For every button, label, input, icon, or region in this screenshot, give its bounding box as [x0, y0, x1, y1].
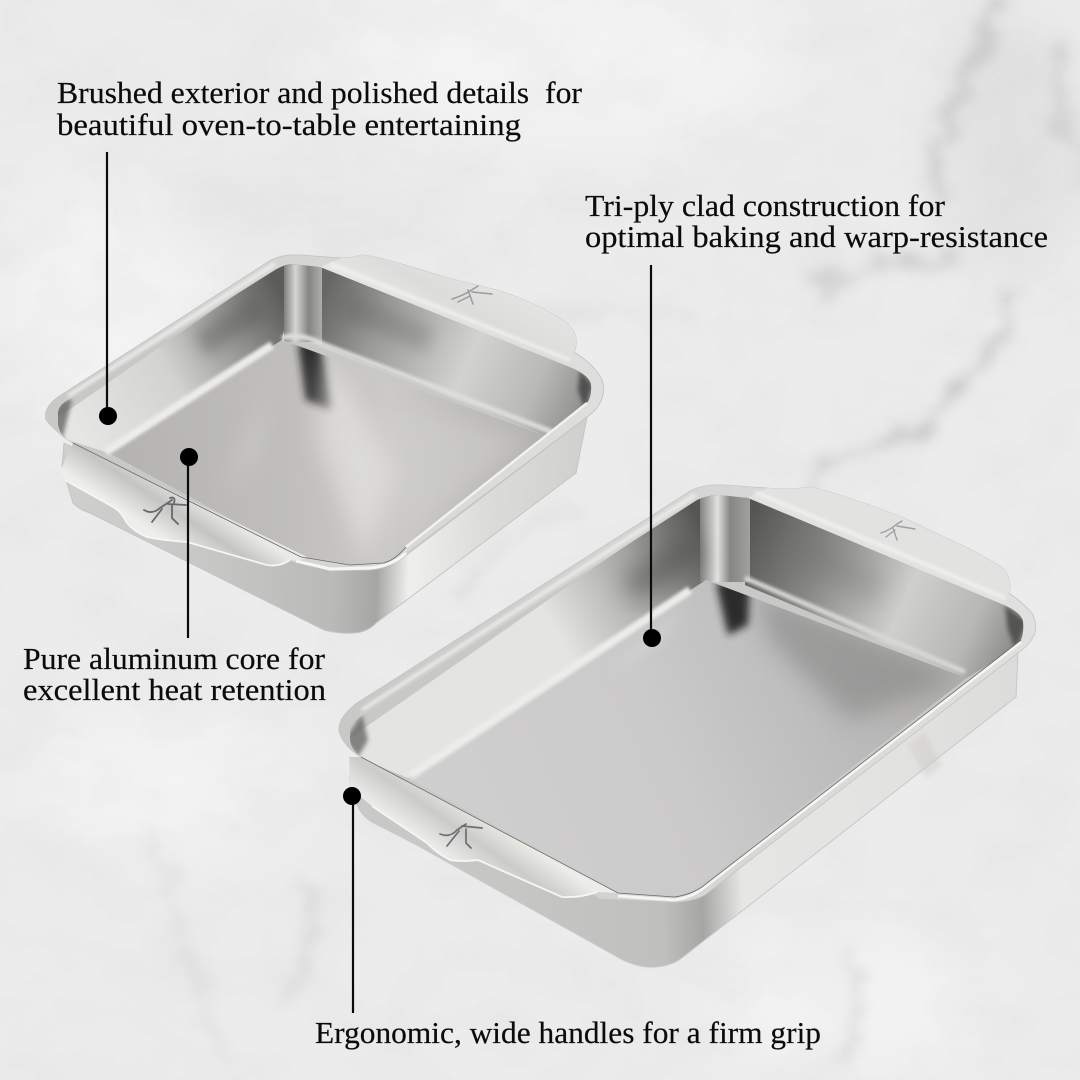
back handle	[320, 255, 576, 368]
text: tri-ply clad	[585, 188, 1048, 254]
marker dot	[643, 629, 661, 647]
leader line	[187, 457, 189, 638]
marker dot	[343, 787, 361, 805]
text: aluminum core	[23, 641, 327, 707]
marker dot	[99, 407, 117, 425]
large pan emblem, back	[881, 521, 915, 540]
large pan body exterior	[350, 653, 1018, 967]
marker dot	[180, 448, 198, 466]
text: aluminum core: Pure aluminum core for	[23, 641, 326, 676]
large pan back handle	[748, 487, 1010, 605]
pan: small square pan	[40, 250, 610, 633]
large pan rim	[339, 485, 1036, 902]
pan body exterior	[62, 417, 587, 633]
callout: ergonomic handles	[343, 787, 361, 1013]
callout: brushed exterior	[99, 152, 117, 425]
text: brushed exterior: beautiful oven-to-table entertaining	[57, 107, 521, 142]
handle emblem, back	[452, 286, 492, 304]
text: tri-ply clad: optimal baking and warp-resistance	[585, 219, 1048, 254]
marble reflection on body	[908, 732, 942, 778]
rim	[46, 255, 604, 571]
text: ergonomic handles: Ergonomic, wide handles for a firm grip	[315, 1015, 821, 1050]
text: brushed exterior	[57, 75, 583, 142]
callout: tri-ply clad	[643, 265, 661, 647]
front handle	[61, 443, 307, 565]
leader line	[352, 796, 354, 1013]
large pan cavity	[350, 495, 1024, 896]
large pan front handle	[349, 757, 618, 897]
pan: large rectangular pan	[339, 480, 1040, 967]
handle emblem, front	[144, 498, 186, 524]
leader line	[106, 152, 108, 416]
text: brushed exterior: Brushed exterior and polished details for	[57, 75, 583, 110]
large pan emblem, front	[440, 824, 482, 848]
text: tri-ply clad: Tri-ply clad construction for	[585, 188, 946, 223]
text: aluminum core: excellent heat retention	[23, 672, 327, 707]
cavity	[58, 264, 592, 564]
leader line	[650, 265, 652, 638]
callout: aluminum core	[180, 448, 198, 638]
